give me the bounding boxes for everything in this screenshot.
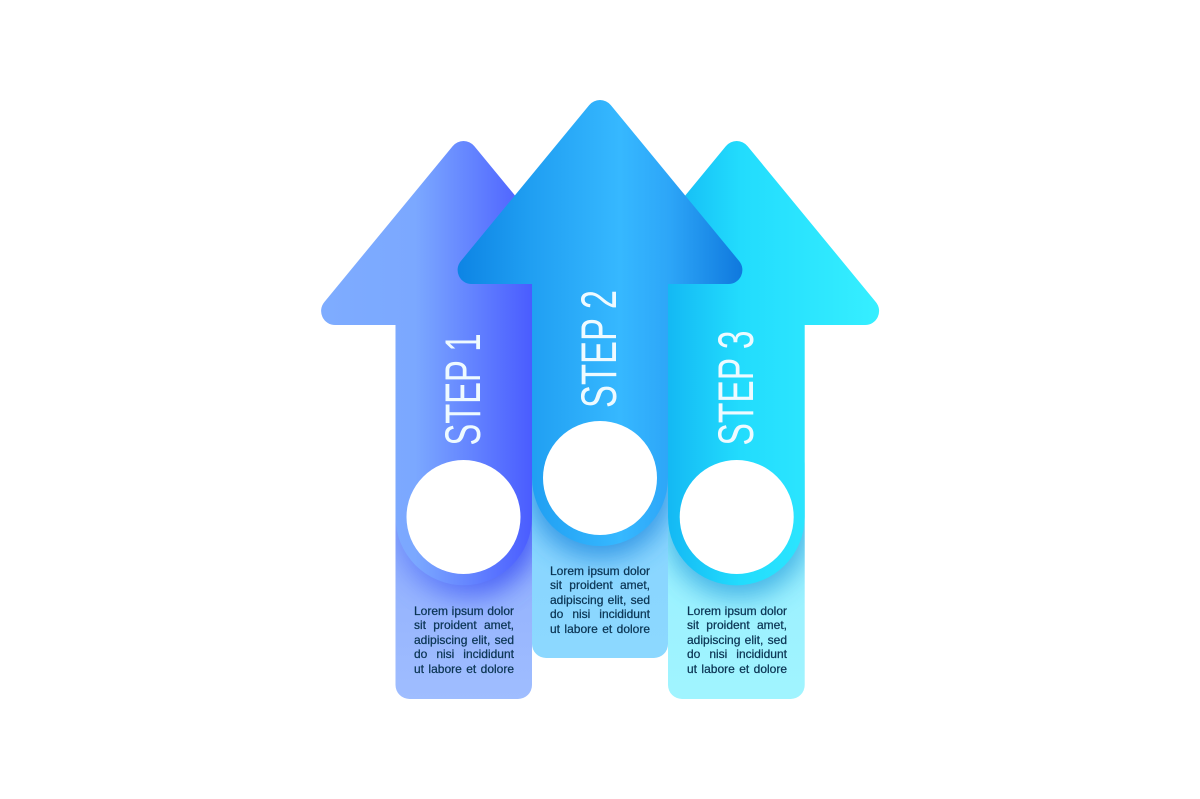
- icon circle: step 2: [543, 421, 657, 535]
- text block: step 1: ut labore et dolore: [414, 662, 514, 676]
- panel: step 1 lower panel: [396, 450, 532, 699]
- heading: step 2: STEP 2: [571, 290, 627, 408]
- text block: step 2: sit proident amet,: [550, 578, 650, 592]
- text block: step 3: ut labore et dolore: [687, 662, 787, 676]
- text block: step 1: [414, 604, 514, 680]
- arrow 1: step 1: [321, 141, 532, 699]
- text block: step 2: Lorem ipsum dolor: [550, 564, 650, 578]
- arrow shape: step 3: [594, 141, 879, 585]
- arrow 3: step 3: [668, 141, 880, 699]
- text block: step 2: [550, 564, 650, 640]
- ring shadow: step 2: [532, 480, 668, 577]
- text block: step 1: Lorem ipsum dolor: [414, 604, 514, 618]
- text block: step 3: adipiscing elit, sed: [687, 633, 787, 647]
- text block: step 3: [687, 604, 787, 680]
- panel: step 2 lower panel: [532, 410, 668, 658]
- text block: step 1: adipiscing elit, sed: [414, 633, 514, 647]
- text block: step 2: do nisi incididunt: [550, 607, 650, 621]
- text block: step 3: do nisi incididunt: [687, 647, 787, 661]
- icon circle: step 3: [680, 460, 794, 574]
- text block: step 2: adipiscing elit, sed: [550, 593, 650, 607]
- ring shadow: step 3: [668, 482, 805, 614]
- heading: step 3: STEP 3: [708, 330, 764, 446]
- icon circle: step 1: [406, 460, 520, 574]
- text block: step 3: Lorem ipsum dolor: [687, 604, 787, 618]
- ring shadow: step 1: [396, 518, 532, 612]
- arrow 2: step 2: [458, 100, 742, 658]
- arrow shape: step 1: [321, 141, 606, 585]
- text block: step 1: sit proident amet,: [414, 618, 514, 632]
- heading: step 1: STEP 1: [435, 334, 491, 446]
- arrow shape: step 2: [458, 100, 742, 546]
- text block: step 1: do nisi incididunt: [414, 647, 514, 661]
- panel: step 3 lower panel: [668, 450, 805, 699]
- text block: step 2: ut labore et dolore: [550, 622, 650, 636]
- text block: step 3: sit proident amet,: [687, 618, 787, 632]
